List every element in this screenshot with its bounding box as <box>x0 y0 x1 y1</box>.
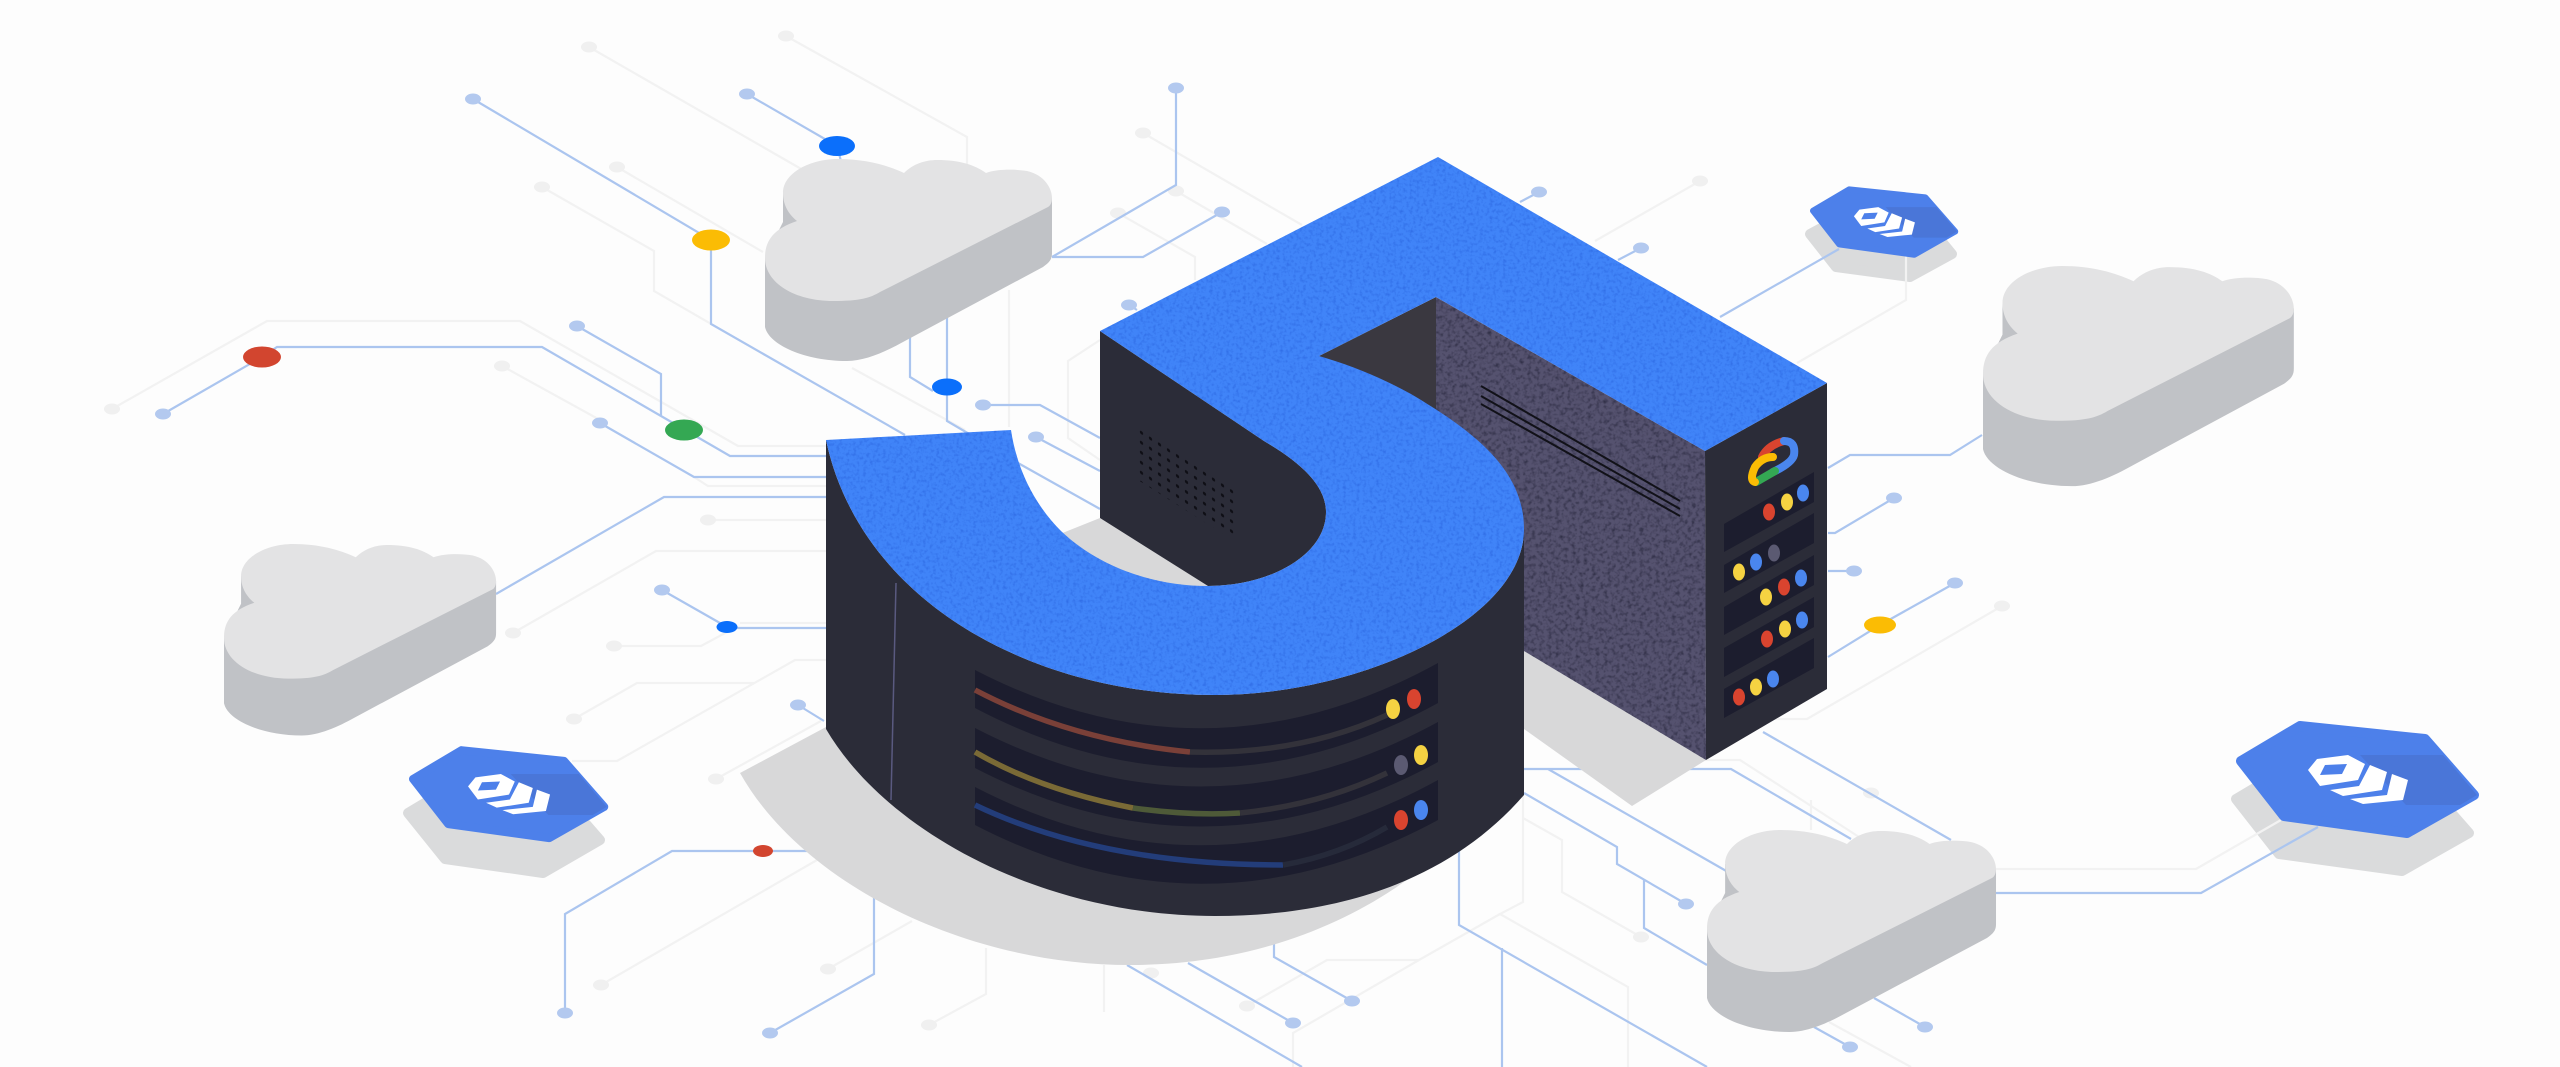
hexagon icon: large right <box>2241 726 2477 833</box>
cloud: left <box>224 544 496 735</box>
circuit pins: light grey <box>104 30 2010 1030</box>
drum: rack bands with status strips and lights <box>975 663 1438 884</box>
drum: dark curved body of the 5 <box>826 440 1524 916</box>
ground shadows under the 5 <box>740 518 1706 965</box>
cloud: bottom right <box>1707 830 1996 1032</box>
cloud: top right <box>1983 266 2294 486</box>
coloured network nodes <box>243 136 1896 857</box>
server block: purple side face <box>1319 297 1706 760</box>
blue top face of the number 5 <box>826 157 1827 695</box>
hexagon icon: small top right <box>1813 189 1957 255</box>
hexagon icon: left <box>413 750 607 838</box>
server block: front rack face <box>1705 383 1827 760</box>
hexagon shadows <box>408 213 2469 873</box>
server block: left dark face with vent grid <box>1100 331 1326 586</box>
icon: Google Cloud logo <box>1752 441 1794 482</box>
cloud: top centre <box>765 159 1052 361</box>
circuit lines: blue <box>163 88 2318 1067</box>
circuit pins: blue <box>155 82 1963 1052</box>
